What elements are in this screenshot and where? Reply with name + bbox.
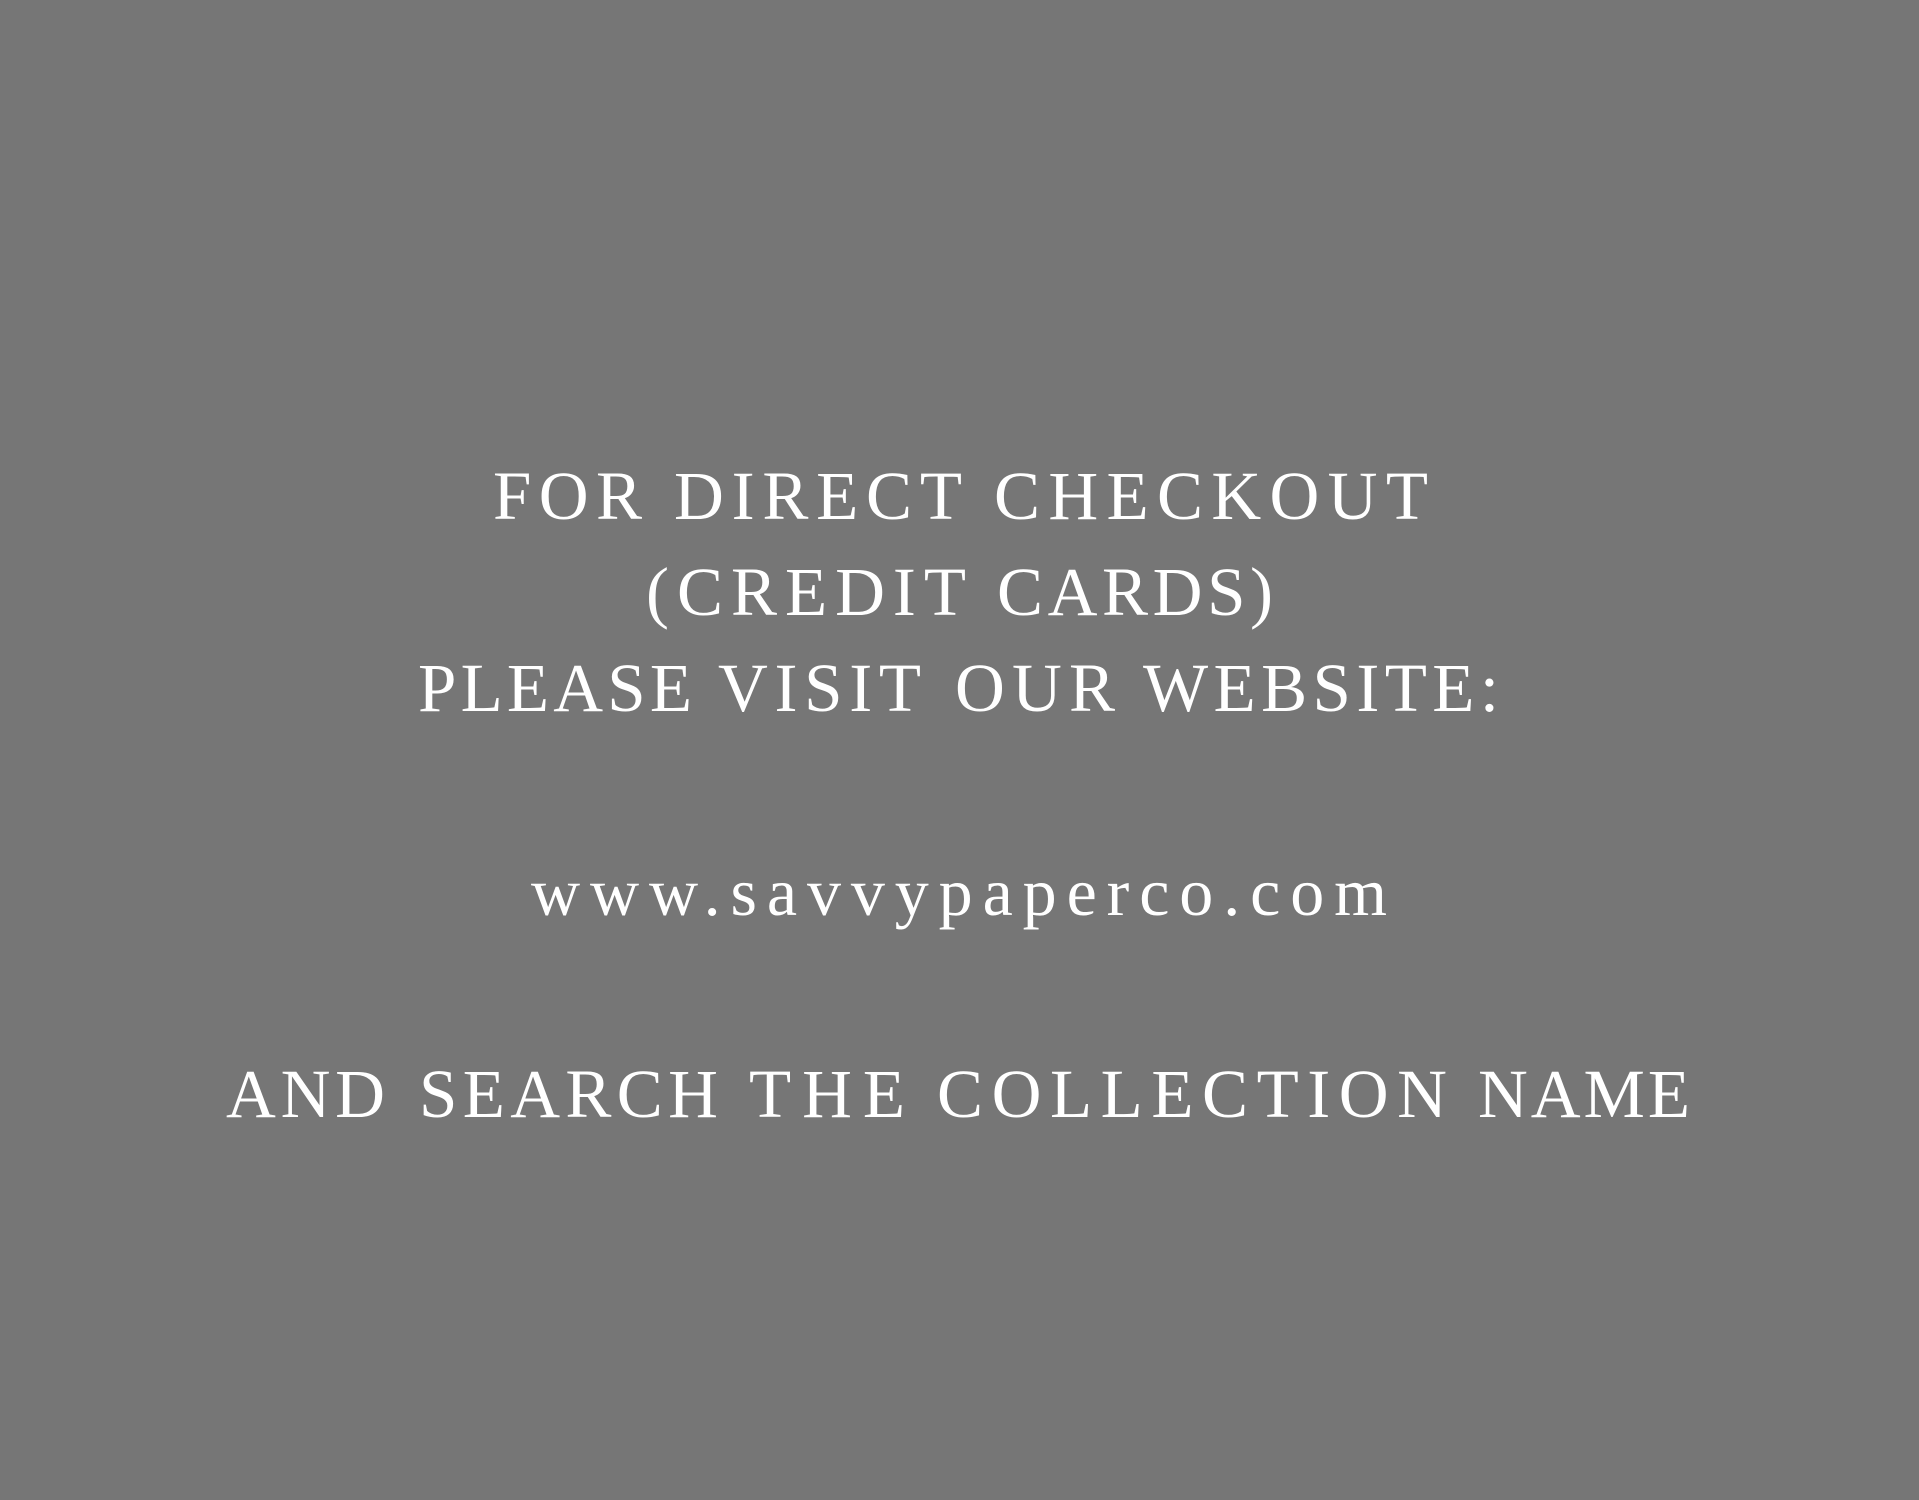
text: search instruction <box>226 1056 1690 1132</box>
text: search instruction: THE <box>749 1056 905 1132</box>
heading: please visit our website: WEBSITE: <box>1143 650 1499 726</box>
heading: for direct checkout: CHECKOUT <box>994 458 1428 534</box>
text: search instruction: SEARCH <box>419 1056 718 1132</box>
text: search instruction: AND <box>226 1056 385 1132</box>
text: search instruction: COLLECTION <box>937 1056 1447 1132</box>
heading: credit cards: CARDS) <box>997 554 1273 630</box>
text: search instruction: NAME <box>1478 1056 1690 1132</box>
heading: for direct checkout <box>493 458 1428 534</box>
heading: for direct checkout: FOR <box>493 458 642 534</box>
heading: please visit our website: VISIT <box>718 650 921 726</box>
heading: for direct checkout: DIRECT <box>674 458 962 534</box>
text: website address: www.savvypaperco.com <box>531 854 1387 930</box>
heading: credit cards: (CREDIT <box>646 554 966 630</box>
heading: credit cards <box>646 554 1273 630</box>
heading: please visit our website <box>418 650 1499 726</box>
heading: please visit our website: PLEASE <box>418 650 692 726</box>
heading: please visit our website: OUR <box>955 650 1115 726</box>
